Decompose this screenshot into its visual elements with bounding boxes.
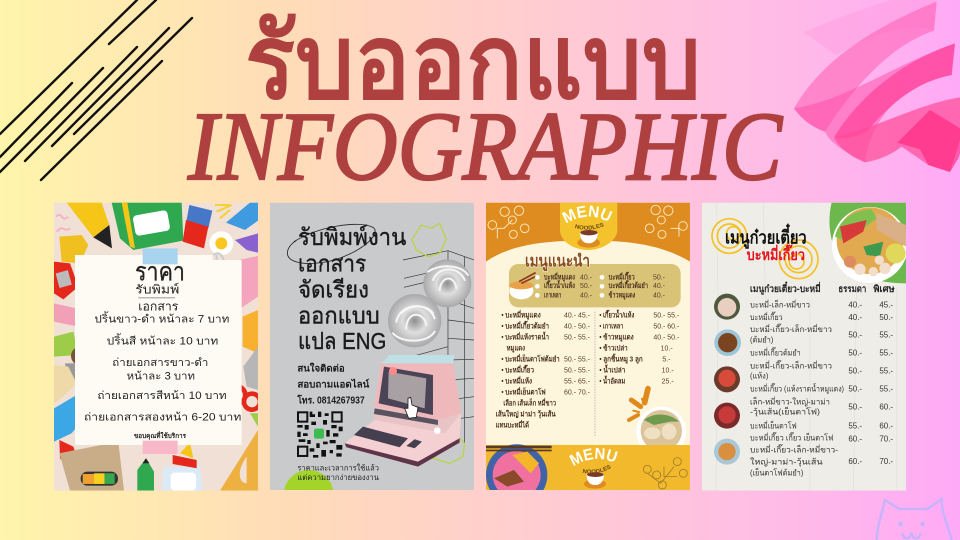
menu list left: 50.- 55.-: [564, 357, 591, 364]
price list text: ปริ้นสี หน้าละ 10 บาท: [107, 333, 218, 348]
menu list right: 10.-: [661, 346, 673, 353]
footer note: ราคาและเวลาการใช้แล้ว: [297, 464, 379, 473]
menu list left: • บะหมี่เย็นตาโฟต้มยำ: [501, 353, 560, 364]
table rows: 50.-: [848, 367, 862, 376]
recommended box: [509, 264, 681, 307]
table rows: 55.-: [879, 367, 893, 376]
table rows: 70.-: [879, 435, 893, 444]
recommended box: บะหมี่หมูแดง: [544, 270, 575, 282]
footer floral motif: [643, 458, 687, 489]
menu list left: [496, 309, 591, 430]
headline text: รับพิมพ์งาน: [298, 224, 406, 250]
table rows: บะหมี่-เกี๊ยว-เล็ก-หมี่ขาว-: [750, 444, 838, 455]
menu list left: • บะหมี่เกี๊ยวต้มยำ: [501, 320, 549, 331]
table rows: 50.-: [848, 349, 862, 358]
footer note: [298, 464, 379, 480]
table rows: บะหมี่เกี๊ยว (แห้งราดน้ำหมูแดง): [750, 383, 844, 395]
menu list right: 50.- 60.-: [653, 324, 680, 331]
recommended box: เกาเหลา: [544, 290, 561, 299]
paper sheet: [75, 255, 242, 445]
menu list right: 40.- 50.-: [653, 335, 680, 342]
contact text: โทร. 0814267937: [296, 394, 365, 406]
table header: ธรรมดา: [838, 284, 866, 295]
menu list left: หมูแดง: [507, 344, 525, 354]
price list text: หน้าละ 3 บาท: [127, 370, 195, 382]
retro computer illustration: [345, 355, 461, 467]
menu list right: • น้ำเปล่า: [599, 364, 625, 375]
menu list left: เลือก เส้นเล็ก หมี่ขาว: [503, 397, 556, 408]
stationery illustrations: [54, 203, 260, 491]
table rows: 55.-: [879, 331, 893, 340]
recommended box: ข้าวหมูแดง: [609, 290, 636, 300]
headline text: แปล ENG: [298, 328, 386, 354]
table rows: เล็ก-หมี่ขาว-ใหญ่-มาม่า: [750, 395, 830, 406]
footer logo: MENU: [569, 448, 618, 466]
cat outline decoration: [877, 499, 952, 540]
table rows: 60.-: [848, 435, 862, 444]
pink ribbon decoration: [794, 0, 960, 172]
menu list right: • เกาเหลา: [599, 322, 623, 331]
recommended box: บะหมี่เกี๊ยวต้มยำ: [609, 279, 648, 290]
heading with noodle swirls: เมนูก๋วยเตี๋ยว: [725, 223, 807, 249]
recommended box: 40.-: [653, 283, 666, 290]
orange burst accents: [629, 389, 648, 420]
table header: พิเศษ: [873, 284, 895, 295]
menu list left: 40.- 50.-: [564, 324, 591, 331]
table header: [750, 282, 894, 295]
title: INFOGRAPHIC: INFOGRAPHIC: [187, 93, 783, 201]
table rows: (แห้ง): [750, 372, 769, 381]
table rows: บะหมี่เกี๊ยวต้มยำ: [750, 347, 801, 358]
price list text: รับพิมพ์: [135, 283, 179, 297]
table rows: บะหมี่เกี๊ยว เกี๊ยว เย็นตาโฟ: [750, 432, 834, 443]
contact text: สนใจติดต่อ: [297, 363, 345, 375]
yellow footer band: [486, 445, 690, 490]
menu list right: • ลูกชิ้นหมู 3 ลูก: [599, 353, 643, 365]
headline text: [298, 224, 406, 354]
floral line motifs: [488, 205, 687, 238]
price list text: ถ่ายเอกสารขาว-ดำ: [112, 357, 208, 369]
heading with noodle swirls: [712, 219, 818, 279]
table rows: บะหมี่เย็นตาโฟ: [750, 419, 797, 430]
green corner with noodle bowl: [829, 203, 908, 283]
recommended box: เกี๊ยวน้ำ/แห้ง: [544, 279, 575, 290]
title: Thai heading: รับออกแบบ: [245, 5, 701, 121]
price list text: [84, 257, 241, 440]
table rows: [750, 299, 893, 477]
table rows: 50.-: [848, 331, 862, 340]
table rows: (เย็นตาโฟต้มยำ): [750, 467, 804, 477]
footer logo: [569, 448, 618, 489]
menu list left: 60.- 70.-: [564, 390, 591, 397]
table rows: 70.-: [879, 457, 893, 466]
menu list left: 55.- 65.-: [564, 379, 591, 386]
header title: [562, 206, 612, 248]
contact text: [296, 363, 370, 406]
recommended box: 40.-: [653, 292, 666, 299]
panel: noodle price list: [702, 203, 908, 491]
section heading: เมนูแนะนำ: [525, 252, 590, 273]
menu list left: • บะหมี่เย็นตาโฟ: [501, 386, 546, 397]
table rows: บะหมี่-เกี๊ยว-เล็ก-หมี่ขาว: [750, 323, 832, 334]
panel: orange noodle menu: [486, 202, 690, 490]
table rows: 60.-: [879, 402, 893, 411]
table rows: 60.-: [879, 421, 893, 430]
header title: MENU: [562, 206, 612, 224]
divider: [594, 312, 596, 436]
price list text: ถ่ายเอกสารสองหน้า 6-20 บาท: [84, 412, 241, 424]
panel: document service poster: [270, 203, 474, 520]
recommended box: 40.-: [580, 292, 593, 299]
table header: เมนูก๋วยเตี๋ยว-บะหมี่: [750, 281, 821, 296]
pink noodle bowl: [486, 444, 552, 490]
menu list left: • บะหมี่หมูแดง: [501, 309, 541, 321]
menu list right: 25.-: [662, 379, 674, 386]
thumbnails: [714, 294, 741, 465]
table rows: บะหมี่เกี๊ยว: [750, 311, 783, 322]
menu list right: • ข้าวเปล่า: [599, 344, 628, 353]
recommended box: 50.-: [653, 274, 666, 281]
table rows: 50.-: [879, 313, 893, 322]
table rows: บะหมี่-เล็ก-หมี่ขาว: [750, 299, 810, 310]
decorative black diagonal lines: [0, 0, 192, 180]
headline text: จัดเรียง: [298, 276, 369, 302]
menu list left: เส้นใหญ่ ม่าม่า วุ้นเส้น: [496, 410, 556, 419]
header title: NOODLES: [575, 222, 604, 230]
recommended box: บะหมี่เกี๊ยว: [609, 270, 635, 281]
table rows: (ต้มยำ): [750, 336, 774, 345]
table rows: 50.-: [848, 385, 862, 394]
table rows: 55.-: [879, 385, 893, 394]
table rows: 50.-: [848, 402, 862, 411]
table rows: 40.-: [848, 313, 862, 322]
menu list left: แทนบะหมี่ได้: [496, 419, 529, 430]
recommended box: 40.-: [580, 274, 593, 281]
menu list left: • บะหมี่แห้ง: [501, 375, 532, 386]
menu list right: • เกี๊ยวน้ำ/แห้ง: [599, 309, 635, 320]
menu list right: 5.-: [662, 357, 671, 364]
price list text: เอกสาร: [138, 299, 179, 313]
menu list left: 50.- 55.-: [564, 335, 591, 342]
menu list left: 50.- 55.-: [564, 368, 591, 375]
price list text: ถ่ายเอกสารสีหน้า 10 บาท: [97, 389, 227, 402]
table rows: 40.-: [848, 301, 862, 310]
price list text: ปริ้นขาว-ดำ หน้าละ 7 บาท: [94, 311, 229, 326]
menu list left: • บะหมี่เกี๊ยว: [501, 364, 534, 375]
headline text: เอกสาร: [298, 251, 366, 277]
menu list left: • บะหมี่แห้งราดน้ำ: [501, 331, 549, 342]
headline text: ออกแบบ: [298, 302, 380, 328]
footer logo: NOODLES: [582, 465, 611, 474]
menu list right: • น้ำอัดลม: [599, 375, 625, 386]
wireframe grid: [403, 251, 474, 447]
table rows: 55.-: [848, 421, 862, 430]
menu list right: [599, 309, 680, 386]
panel: print price poster: [54, 203, 260, 491]
recommended box: 50.-: [580, 283, 593, 290]
contact text: สอบถามแอดไลน์: [297, 379, 370, 391]
price list text: ราคา: [135, 257, 185, 287]
heading with noodle swirls: บะหมี่เกี๊ยว: [747, 244, 805, 264]
menu list right: 10.-: [662, 368, 674, 375]
table rows: ใหญ่-มาม่า-วุ้นเส้น: [750, 457, 823, 466]
menu list right: • ข้าวหมูแดง: [599, 333, 634, 343]
table rows: 55.-: [879, 349, 893, 358]
table rows: 60.-: [848, 457, 862, 466]
QR code: [296, 411, 343, 458]
orange header: [486, 203, 690, 262]
green circle: [284, 470, 334, 490]
footer note: แต่ความยากง่ายของงาน: [297, 473, 380, 482]
menu list right: 50.- 55.-: [653, 313, 680, 320]
table rows: 45.-: [879, 301, 893, 310]
wonton soup bowl: [636, 406, 686, 445]
silver roses: [388, 259, 471, 347]
price list text: ขอบคุณที่ใช้บริการ: [134, 430, 186, 440]
orbit scribble: [287, 224, 375, 263]
table rows: -วุ้นเส้น(เย็นตาโฟ): [750, 407, 820, 417]
menu list left: 40.- 45.-: [564, 313, 591, 320]
table rows: บะหมี่-เกี๊ยว-เล็ก-หมี่ขาว: [750, 359, 832, 370]
